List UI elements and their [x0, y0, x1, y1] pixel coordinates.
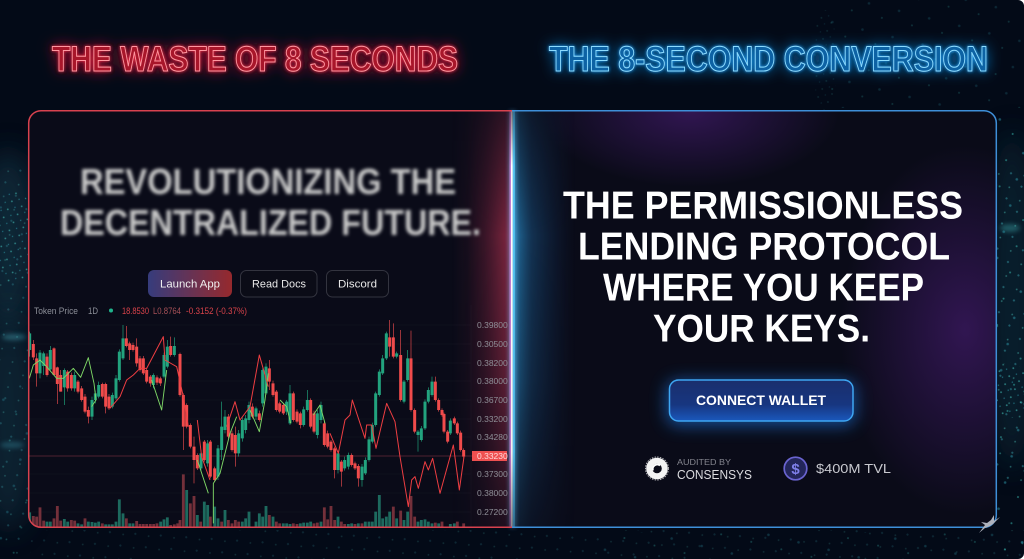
heading: blurred left headline: DECENTRALIZED FUTURE.: [60, 202, 481, 243]
chart: series: [29, 320, 464, 527]
heading: right headline: WHERE YOU KEEP: [603, 266, 924, 310]
candle wicks: green: [30, 325, 450, 487]
button: launch app: [148, 270, 232, 297]
heading: blurred left headline: [60, 161, 481, 243]
icon: dollar coin: [784, 457, 807, 480]
chart axis labels: 0.38000: [477, 376, 508, 386]
chart legend: [34, 306, 247, 316]
heading: right headline: YOUR KEYS.: [653, 308, 870, 350]
icon: dollar coin: $: [791, 461, 800, 478]
heading: right headline: LENDING PROTOCOL: [578, 226, 950, 268]
button: connect wallet: CONNECT WALLET: [696, 392, 826, 408]
chart axis labels: 0.39800: [477, 320, 508, 330]
chart axis labels: 0.27200: [477, 507, 508, 517]
button: discord: [326, 270, 388, 297]
volume bars: green: [30, 490, 454, 527]
candle bodies: red: [33, 337, 464, 480]
indicator line: green: [29, 358, 325, 523]
heading: right headline: [563, 184, 963, 350]
particle clusters: [0, 192, 38, 284]
text: tvl: $400M TVL: [816, 461, 891, 476]
indicator line: red: [110, 337, 464, 507]
chart axis labels: 0.38000: [477, 488, 508, 498]
chart gridlines: [29, 305, 471, 528]
chart legend: -0.3152 (-0.37%): [186, 306, 247, 316]
chart axis labels: 0.33200: [477, 414, 508, 424]
candle wicks: red: [33, 320, 464, 487]
button: discord: Discord: [338, 278, 377, 290]
text: audited by consensys: AUDITED BY: [677, 457, 731, 467]
page corners: [1018, 0, 1024, 559]
chart axis labels: 0.30500: [477, 339, 508, 349]
button: connect wallet: [666, 380, 856, 426]
icon: corner sparkle: [979, 515, 1000, 533]
chart legend: L0.8764: [153, 306, 181, 316]
button: read docs: Read Docs: [252, 278, 306, 290]
chart axis labels: 0.37300: [477, 469, 508, 479]
icon: consensys swirl logo: [646, 457, 668, 480]
candle bodies: green: [30, 333, 450, 480]
button: launch app: Launch App: [160, 278, 220, 290]
chart legend: 18.8530: [122, 306, 149, 316]
heading: blurred left headline: REVOLUTIONIZING THE: [80, 161, 456, 202]
text: audited by consensys: CONSENSYS: [677, 468, 752, 482]
chart axis labels: 0.36700: [477, 395, 508, 405]
chart legend: Token Price: [34, 306, 78, 316]
chart legend: 1D: [88, 306, 98, 316]
chart price tag: 0.33230: [477, 451, 508, 461]
heading: right headline: THE PERMISSIONLESS: [563, 184, 963, 228]
divider line: [509, 110, 516, 528]
text: audited by consensys: [677, 457, 752, 482]
chart axis labels: 0.34280: [477, 432, 508, 442]
panel: right side glow: [452, 37, 1024, 528]
volume bars: red: [33, 474, 464, 527]
chart: token price candlesticks: [29, 305, 472, 528]
title: the waste of 8 seconds: THE WASTE OF 8 SECONDS: [52, 39, 458, 79]
frame border: red left: [29, 111, 512, 527]
button: read docs: [240, 270, 317, 297]
frame border: blue right: [512, 111, 996, 527]
chart axis labels: 0.38200: [477, 358, 508, 368]
chart axis labels: [477, 320, 508, 517]
chart: price marker line: [30, 456, 472, 457]
panel: comparison frame: [28, 108, 998, 530]
